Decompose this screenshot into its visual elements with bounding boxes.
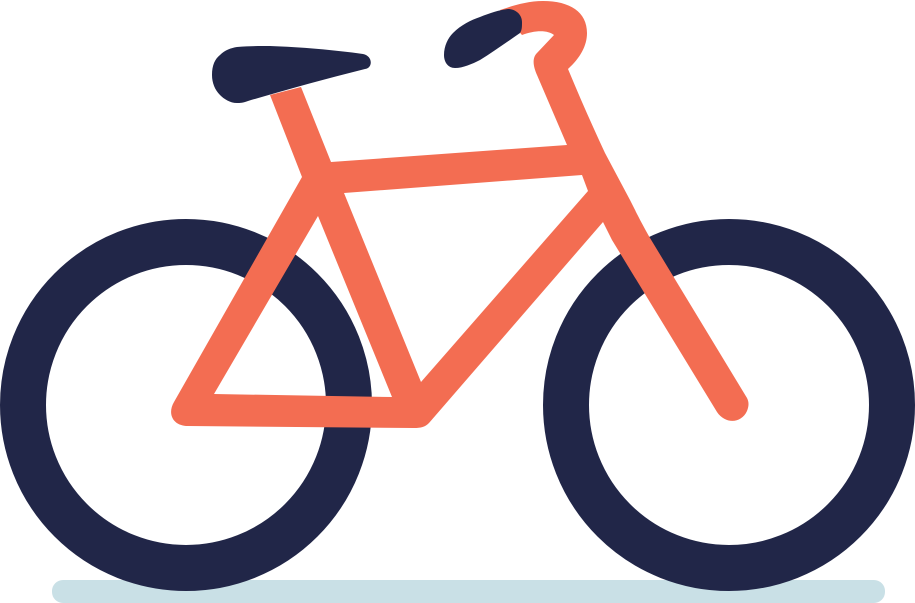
rear wheel xyxy=(23,242,349,568)
ground shadow xyxy=(52,580,885,603)
bicycle frame, fork and handlebar xyxy=(171,1,748,428)
saddle xyxy=(212,46,371,103)
handlebar grip xyxy=(444,9,522,68)
front wheel xyxy=(566,242,892,568)
